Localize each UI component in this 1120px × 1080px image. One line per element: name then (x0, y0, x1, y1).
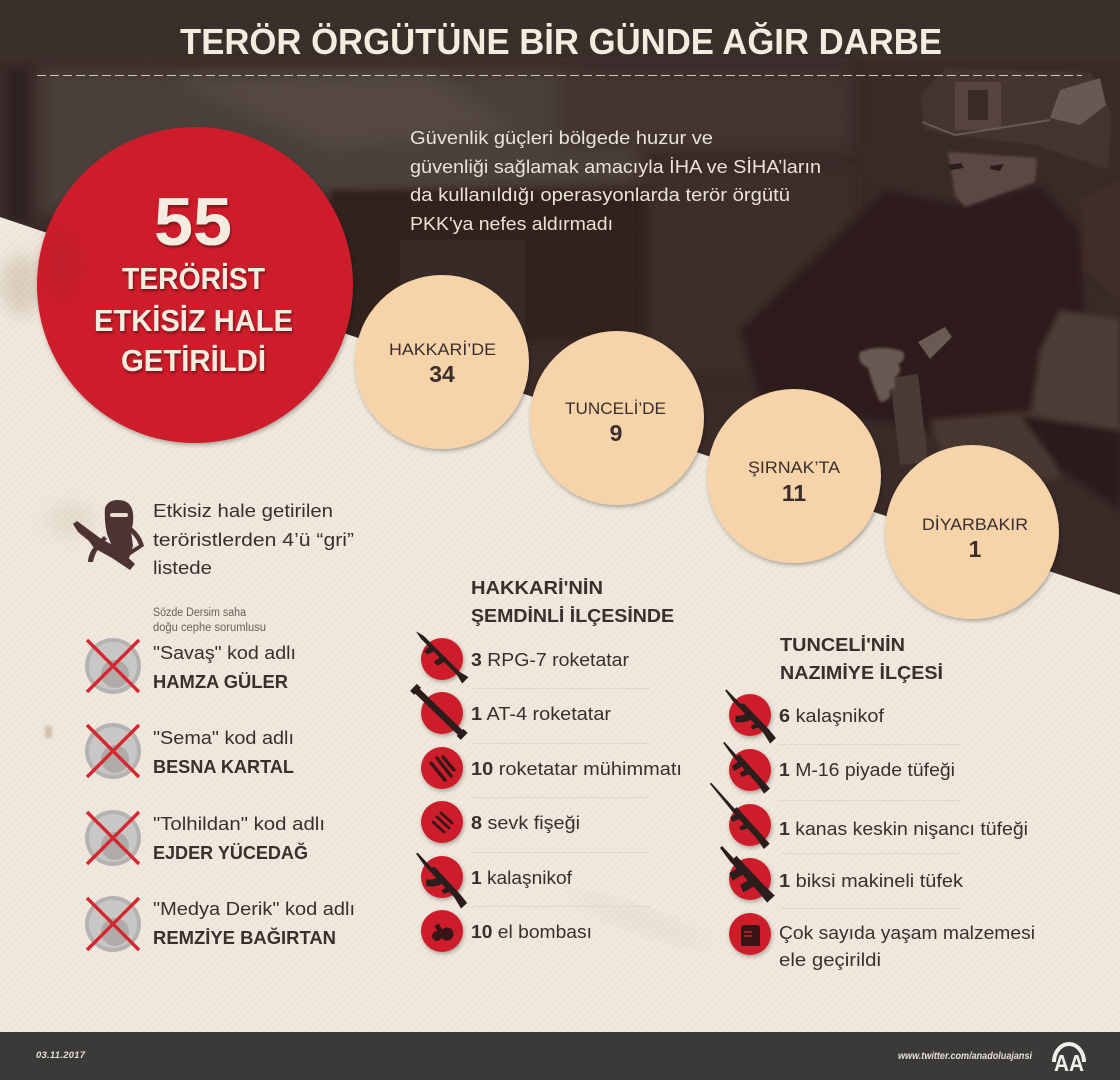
item: hand grenades: 10 el bombası (471, 922, 592, 942)
item: rocket ammunition (421, 747, 682, 789)
item: sniper rifle: 1 kanas keskin nişancı tüfeği (779, 819, 1028, 839)
person: Remziye Bağırtan (85, 896, 355, 952)
item: AT-4 (410, 684, 611, 740)
callout: Hakkari (355, 275, 529, 449)
text: grey list note: teröristlerden 4’ü “gri” (153, 530, 354, 550)
callout: Diyarbakir: 1 (969, 536, 982, 562)
callout: 55 terrorists: GETİRİLDİ (121, 343, 266, 378)
person: Remziye Bağırtan: REMZİYE BAĞIRTAN (153, 927, 336, 948)
intro paragraph: Güvenlik güçleri bölgede huzur ve (410, 128, 713, 148)
callout: Hakkari: HAKKARİ’DE (389, 340, 496, 359)
item: propellant charges: 8 sevk fişeği (471, 813, 580, 833)
person: Remziye Bağırtan: "Medya Derik" kod adlı (153, 899, 355, 919)
item: machine gun (710, 843, 964, 910)
item: supplies: ele geçirildi (779, 950, 881, 970)
person: Ejder Yücedağ: "Tolhildan" kod adlı (153, 814, 325, 834)
item: kalashnikov x6 (715, 688, 885, 751)
text: grey list note (153, 501, 354, 578)
intro paragraph: PKK'ya nefes aldırmadı (410, 214, 613, 234)
item: machine gun: 1 biksi makineli tüfek (779, 871, 964, 891)
callout: Sirnak (707, 389, 881, 563)
callout: Hakkari: 34 (429, 361, 455, 387)
date: 03.11.2017 (36, 1050, 86, 1061)
item: rocket ammunition: 10 roketatar mühimmatı (471, 759, 682, 779)
item: sniper rifle (703, 781, 1028, 853)
item: kalashnikov x6: 6 kalaşnikof (779, 706, 885, 726)
callout: 55 terrorists: TERÖRİST (122, 261, 265, 296)
person: Besna Kartal: BESNA KARTAL (153, 757, 294, 777)
callout: Diyarbakir (885, 445, 1059, 619)
item: supplies: Çok sayıda yaşam malzemesi (779, 923, 1035, 943)
callout: Tunceli (530, 331, 704, 505)
item: kalashnikov: 1 kalaşnikof (471, 868, 573, 888)
callout: 55 terrorists: ETKİSİZ HALE (94, 303, 293, 338)
soldier hand and magazine (859, 327, 952, 465)
person: Hamza Güler: "Savaş" kod adlı (153, 643, 296, 663)
item: kalashnikov (405, 851, 573, 916)
heading: Hakkari Semdinli (471, 578, 674, 626)
item: AT-4: 1 AT-4 roketatar (471, 704, 611, 724)
icon: masked militant with rifle (73, 500, 144, 570)
heading: Tunceli Nazimiye: NAZIMİYE İLÇESİ (780, 663, 943, 683)
callout: Diyarbakir: DİYARBAKIR (922, 515, 1028, 534)
person: Hamza Güler: HAMZA GÜLER (153, 672, 288, 692)
source link: www.twitter.com/anadoluajansi (898, 1051, 1032, 1062)
logo: AA: AA (1054, 1050, 1084, 1076)
item: propellant charges (421, 801, 580, 843)
footer bar (0, 1032, 1120, 1080)
item: M-16 (715, 740, 955, 799)
text: role caption: Sözde Dersim saha (153, 607, 247, 619)
text: role caption (153, 607, 266, 634)
soldier torso and mask (740, 185, 1090, 430)
person: Hamza Güler (85, 638, 296, 694)
callout: Tunceli: 9 (610, 420, 622, 446)
item: supplies (729, 913, 1035, 970)
soldier helmet (920, 68, 1112, 170)
item: RPG-7: 3 RPG-7 roketatar (471, 650, 629, 670)
intro paragraph (410, 128, 821, 234)
intro paragraph: güvenliği sağlamak amacıyla İHA ve SİHA’ların (410, 157, 821, 177)
heading: Tunceli Nazimiye (780, 635, 943, 683)
item: hand grenades (421, 910, 592, 952)
callout: Sirnak: ŞIRNAK’TA (748, 458, 841, 477)
intro paragraph: da kullanıldığı operasyonlarda terör örgütü (410, 185, 790, 205)
item: M-16: 1 M-16 piyade tüfeği (779, 760, 955, 780)
item: RPG-7 (410, 628, 629, 687)
text: role caption: doğu cephe sorumlusu (153, 622, 266, 634)
heading: Tunceli Nazimiye: TUNCELİ'NİN (780, 635, 905, 655)
person: Besna Kartal (85, 723, 294, 779)
soldier face (948, 152, 1037, 207)
callout: 55 terrorists: 55 (154, 184, 232, 260)
person: Ejder Yücedağ (85, 810, 325, 866)
person: Besna Kartal: "Sema" kod adlı (153, 728, 294, 748)
dark photo background: soldier (0, 0, 1120, 600)
heading: Hakkari Semdinli: ŞEMDİNLİ İLÇESİNDE (471, 606, 674, 626)
callout: 55 terrorists (37, 127, 353, 443)
text: grey list note: Etkisiz hale getirilen (153, 501, 333, 521)
text: grey list note: listede (153, 558, 212, 578)
heading: Hakkari Semdinli: HAKKARİ'NİN (471, 578, 603, 598)
callout: Tunceli: TUNCELİ’DE (565, 399, 666, 418)
callout: Sirnak: 11 (782, 480, 806, 506)
person: Ejder Yücedağ: EJDER YÜCEDAĞ (153, 842, 308, 863)
soldier camouflage (930, 309, 1120, 508)
dashed rule (37, 74, 1082, 76)
title: TERÖR ÖRGÜTÜNE BİR GÜNDE AĞIR DARBE (180, 21, 942, 62)
